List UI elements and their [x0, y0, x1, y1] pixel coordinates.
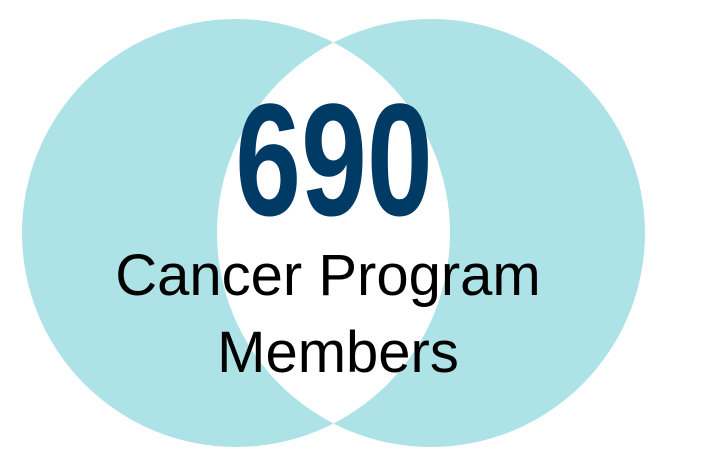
- big number 690: 690: [235, 71, 433, 249]
- overlap lens: [217, 42, 450, 424]
- label line 1: Cancer Program: [115, 243, 541, 308]
- left circle: [22, 19, 450, 447]
- right circle: [217, 19, 645, 447]
- label line 2: Members: [217, 320, 459, 385]
